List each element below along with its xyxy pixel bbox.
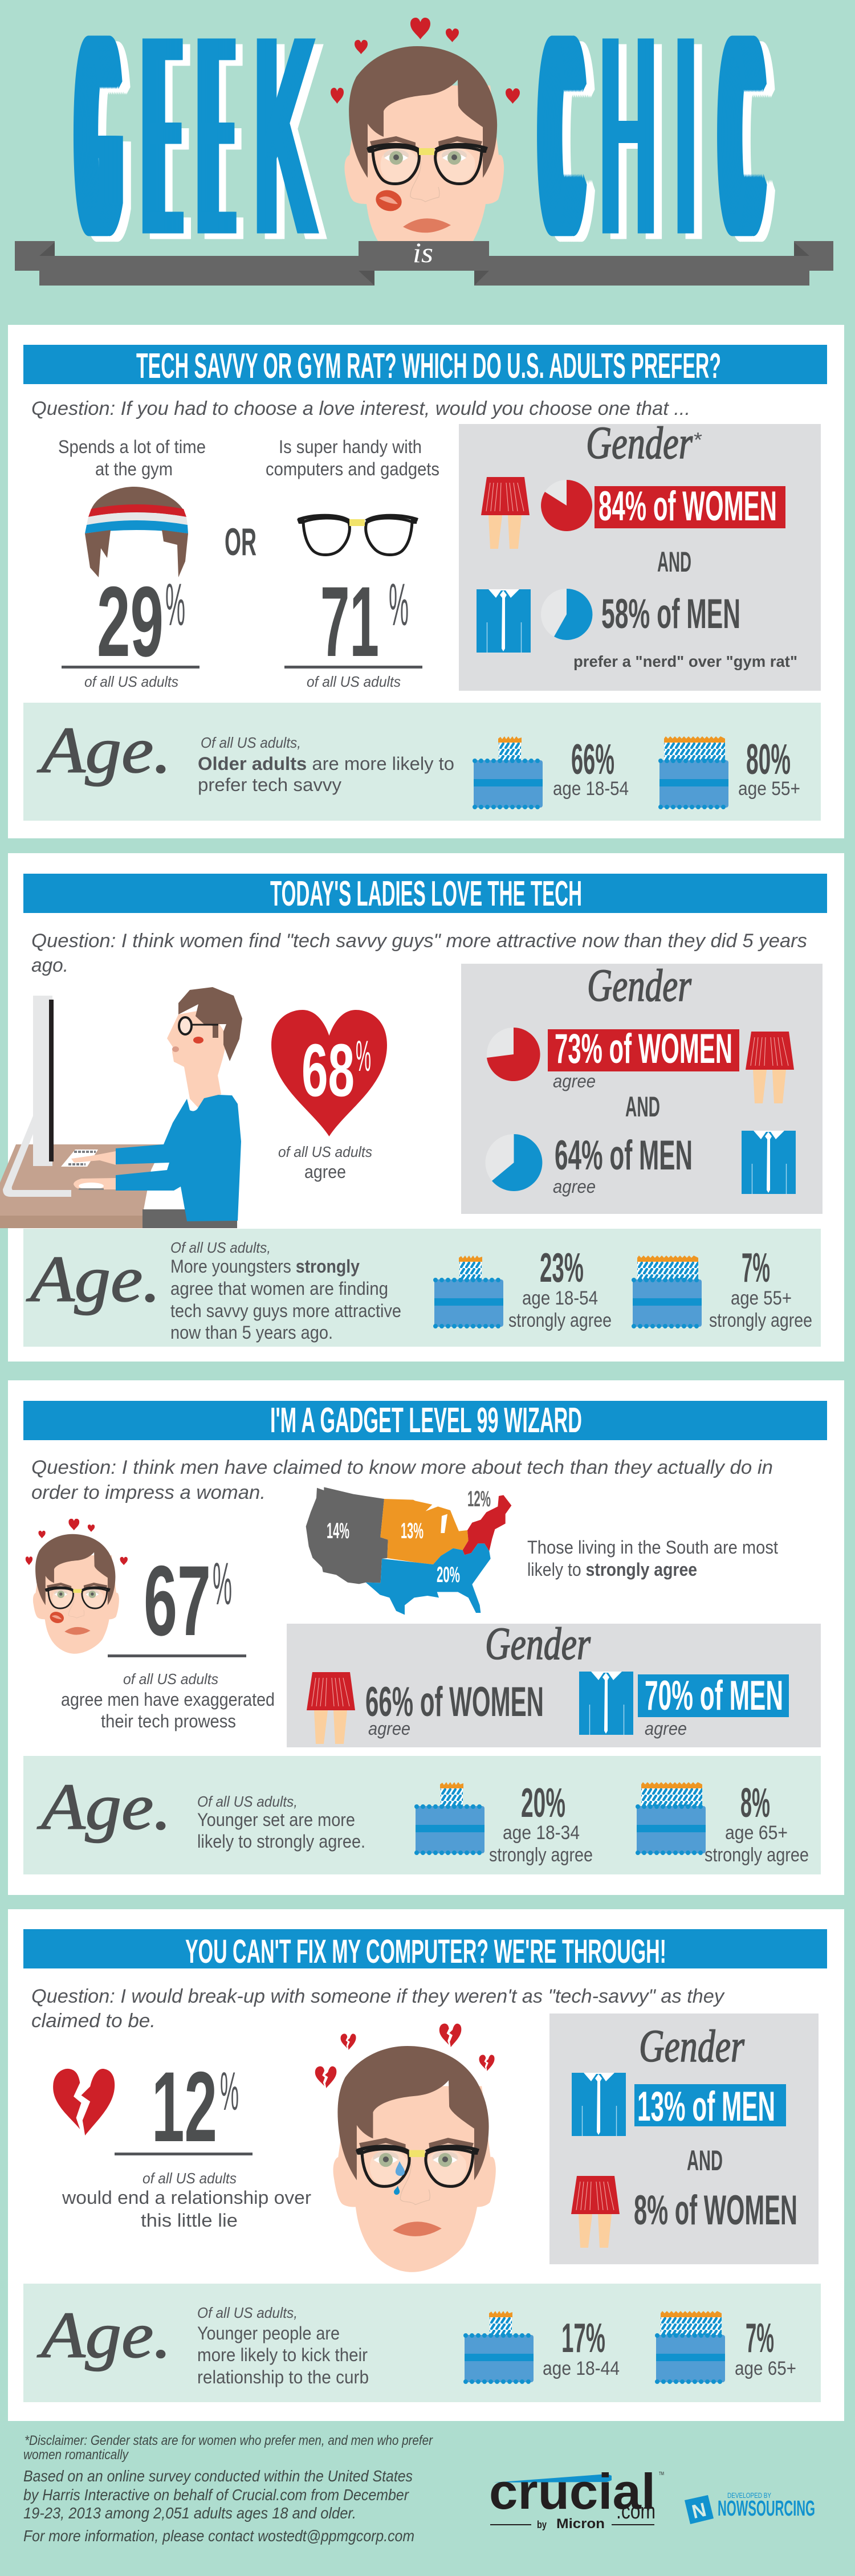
age description <box>198 734 454 795</box>
option: gym: at the gym <box>95 459 173 479</box>
stat: 29% <box>62 566 199 690</box>
stat: 68% heart <box>271 1010 387 1136</box>
age description: relationship to the curb <box>197 2367 369 2387</box>
icon: cake large <box>637 1782 706 1853</box>
icon: glasses <box>297 516 418 555</box>
caption: 68%: agree <box>304 1161 346 1182</box>
logo: crucial.com: TM <box>659 2471 664 2476</box>
age description: Of all US adults, <box>197 2304 298 2321</box>
age description <box>197 1793 365 1852</box>
icon: cake small <box>465 2311 534 2382</box>
age description: likely to strongly agree. <box>197 1831 365 1852</box>
stat: 12%: 12 <box>152 2052 217 2163</box>
icon: broken heart <box>53 2069 115 2135</box>
age description: Of all US adults, <box>170 1239 271 1256</box>
age description: now than 5 years ago. <box>170 1322 333 1343</box>
icon: cake small <box>474 736 543 808</box>
footer: disclaimer and sources: by Harris Interactive on behalf of Crucial.com from December <box>23 2486 409 2504</box>
stat: 7% <box>735 2316 796 2379</box>
stat: 8% <box>705 1780 809 1866</box>
stat: 7% <box>709 1245 812 1331</box>
icon: shirt <box>579 1672 633 1735</box>
logo: crucial.com: .com <box>616 2500 656 2524</box>
title word: GEEK <box>71 0 327 296</box>
stat: 64% of men: 64% of MEN <box>555 1132 693 1179</box>
caption: prefer a "nerd" over "gym rat" <box>573 653 797 670</box>
header illustration: geek head <box>344 46 504 268</box>
heading: Age: Age. <box>36 1771 172 1843</box>
icon: lipstick kiss <box>373 188 404 214</box>
stat: 29%: of all US adults <box>84 673 178 690</box>
stat: 66% of women: 66% of WOMEN <box>365 1679 544 1725</box>
question <box>31 930 807 976</box>
stat: 67%: of all US adults <box>123 1670 218 1688</box>
text: is: is <box>413 237 433 268</box>
panel: gadget level 99 wizard <box>8 1380 844 1895</box>
stat: 66% <box>553 735 629 800</box>
age description: more likely to kick their <box>197 2345 368 2365</box>
question: Question: I would break-up with someone if they weren't as "tech-savvy" as they <box>31 1986 725 2007</box>
heading: Gender: Gender <box>485 1619 591 1669</box>
panel: gender <box>549 2013 819 2264</box>
question <box>31 1457 773 1503</box>
stat: 71%: % <box>389 572 409 638</box>
option: tech: computers and gadgets <box>266 459 439 479</box>
stat: 80%: age 55+ <box>738 778 800 800</box>
heading: Age: Age. <box>36 714 172 786</box>
icon: hair with sweatband <box>85 487 188 577</box>
logo: nowsourcing <box>685 2491 815 2524</box>
heading <box>23 1401 827 1440</box>
question: Question: I think women find "tech savvy guys" more attractive now than they did 5 years <box>31 930 807 952</box>
panel: age <box>23 1229 821 1347</box>
stat: 66%: 66% <box>571 735 614 783</box>
ribbon banner <box>15 237 833 286</box>
stat: 12%: this little lie <box>141 2210 238 2231</box>
logo: nowsourcing: N <box>690 2499 709 2523</box>
stat: 73% of women <box>548 1026 739 1091</box>
age description: Of all US adults, <box>197 1793 298 1810</box>
panel: you can't fix my computer <box>8 1909 844 2421</box>
map caption: Those living in the South are most <box>527 1537 778 1558</box>
footer: disclaimer and sources: Based on an online survey conducted within the United States <box>23 2467 413 2485</box>
map: US regions <box>306 1487 511 1615</box>
question <box>31 1986 725 2032</box>
footer: disclaimer and sources <box>23 2433 433 2545</box>
panel: age <box>23 1756 821 1874</box>
icon: skirt <box>746 1032 794 1103</box>
age description: Younger people are <box>197 2323 340 2343</box>
stat: 17%: age 18-44 <box>543 2358 620 2379</box>
stat: 20% <box>489 1780 593 1866</box>
pie: 58% <box>541 589 592 640</box>
illustration: crying geek head <box>333 2046 496 2272</box>
stat: 20%: age 18-34 <box>503 1822 580 1844</box>
icon: cake large <box>656 2311 725 2382</box>
icon: floating hearts <box>331 18 520 104</box>
illustration: small geek head with hearts <box>26 1519 128 1654</box>
stat: 70% of men: agree <box>645 1718 687 1739</box>
stat: 67%: 67 <box>144 1546 211 1657</box>
icon: shirt <box>572 2073 626 2136</box>
stat: 12% <box>62 2052 311 2231</box>
age description <box>170 1239 401 1343</box>
title word: CHIC <box>535 0 775 296</box>
text: AND: AND <box>687 2145 723 2176</box>
map caption: likely to strongly agree <box>527 1559 697 1580</box>
panel: today's ladies love the tech <box>0 853 844 2545</box>
stat: 66% of women: agree <box>368 1718 410 1739</box>
option: tech: Is super handy with <box>279 437 422 457</box>
icon: shirt <box>742 1131 796 1194</box>
stat: 8%: age 65+ <box>725 1822 788 1844</box>
heading: TODAY'S LADIES LOVE THE TECH <box>270 874 582 914</box>
icon: cake small <box>416 1782 484 1853</box>
stat: 80% <box>738 735 800 800</box>
age description: Of all US adults, <box>201 734 301 751</box>
stat: 68% heart: % <box>356 1032 371 1081</box>
map: US regions: 20% <box>437 1563 460 1587</box>
age description <box>197 2304 369 2387</box>
heading: Gender: Gender <box>587 961 692 1011</box>
icon: skirt <box>307 1672 355 1744</box>
stat: 80%: 80% <box>746 735 791 783</box>
icon: shirt <box>477 589 531 653</box>
stat: 73% of women: agree <box>553 1071 596 1091</box>
text: AND: AND <box>625 1091 660 1123</box>
stat: 70% of men <box>638 1673 789 1739</box>
stat: 12%: of all US adults <box>142 2170 237 2187</box>
logo: crucial.com: crucial <box>489 2463 656 2520</box>
stat: 20%: 20% <box>521 1780 565 1826</box>
stat: 64% of men: agree <box>553 1176 596 1197</box>
stat: 29%: 29 <box>97 566 164 678</box>
panel: age <box>23 2284 821 2402</box>
illustration: person at computer <box>0 987 242 1228</box>
stat: 71%: of all US adults <box>307 673 401 690</box>
map: US regions: 14% <box>327 1519 349 1543</box>
stat: 7%: strongly agree <box>709 1310 812 1331</box>
panel: tech savvy or gym rat <box>8 325 844 838</box>
stat: 12%: % <box>220 2061 239 2122</box>
stat: 67%: their tech prowess <box>101 1711 236 1731</box>
stat: 7%: 7% <box>746 2316 774 2361</box>
heading <box>23 1929 827 1970</box>
stat: 67%: agree men have exaggerated <box>61 1689 275 1710</box>
age description: More youngsters strongly <box>170 1256 360 1277</box>
map: US regions: 12% <box>467 1487 491 1511</box>
logo: crucial.com: by <box>537 2519 547 2530</box>
stat: 71% <box>284 566 422 690</box>
icon: tears <box>394 2161 405 2195</box>
option: gym <box>58 437 206 479</box>
map caption <box>527 1537 778 1580</box>
icon: cake small <box>434 1256 503 1327</box>
pie: 64% <box>486 1134 543 1191</box>
asterisk: * <box>694 428 702 451</box>
logo: nowsourcing: DEVELOPED BY <box>727 2491 771 2500</box>
question: ago. <box>31 955 68 976</box>
stat: 8%: 8% <box>740 1780 770 1826</box>
stat: 8%: strongly agree <box>705 1844 809 1866</box>
question: Question: If you had to choose a love interest, would you choose one that ... <box>31 398 690 419</box>
question: claimed to be. <box>31 2010 156 2032</box>
stat: 13% of men <box>634 2084 786 2130</box>
text: OR: OR <box>225 520 256 564</box>
question: Question: I think men have claimed to know more about tech than they actually do in <box>31 1457 773 1478</box>
age description: agree that women are finding <box>170 1278 388 1299</box>
caption: 68% <box>278 1143 372 1182</box>
footer: disclaimer and sources: women romantically <box>23 2447 129 2463</box>
stat: 68% heart: 68 <box>302 1028 355 1112</box>
option: gym: Spends a lot of time <box>58 437 206 457</box>
stat: 17%: 17% <box>561 2316 605 2361</box>
stat: 71%: 71 <box>320 566 379 678</box>
age description: tech savvy guys more attractive <box>170 1301 401 1321</box>
heading: Age: Age. <box>36 2299 172 2371</box>
panel: gender <box>459 418 821 691</box>
stat: 20%: strongly agree <box>489 1844 593 1866</box>
stat: 67%: % <box>213 1551 232 1617</box>
stat: 64% of men <box>553 1132 693 1197</box>
footer: disclaimer and sources: *Disclaimer: Gender stats are for women who prefer men, and men who prefer <box>25 2433 433 2448</box>
heading: I'M A GADGET LEVEL 99 WIZARD <box>270 1401 582 1440</box>
pie: 73% <box>487 1028 540 1081</box>
footer: disclaimer and sources: 19-23, 2013 among 2,051 adults ages 18 and older. <box>23 2504 356 2522</box>
caption: 68%: of all US adults <box>278 1143 372 1160</box>
footer: disclaimer and sources: For more information, please contact wostedt@ppmgcorp.com <box>23 2527 414 2545</box>
heading <box>23 874 827 914</box>
stat: 23%: age 18-54 <box>522 1287 598 1309</box>
panel: gender <box>287 1619 821 1747</box>
stat: 29%: % <box>165 572 185 638</box>
stat: 58% of men: 58% of MEN <box>601 591 740 637</box>
heading: Gender: Gender <box>639 2021 745 2072</box>
stat: 66%: age 18-54 <box>553 778 629 800</box>
stat: 7%: 7% <box>742 1245 770 1291</box>
stat: 17% <box>543 2316 620 2379</box>
icon: cake large <box>659 736 728 808</box>
stat: 67% <box>61 1546 275 1731</box>
stat: 7%: age 55+ <box>731 1287 792 1309</box>
age description: Older adults are more likely to <box>198 753 454 774</box>
age description: prefer tech savvy <box>198 775 341 795</box>
pie: 84% <box>541 480 592 531</box>
question: order to impress a woman. <box>31 1482 266 1503</box>
stat: 23% <box>508 1245 612 1331</box>
panel: gender <box>461 961 823 1214</box>
stat: 12%: would end a relationship over <box>62 2187 311 2208</box>
option: tech <box>266 437 439 479</box>
icon: skirt <box>481 477 530 549</box>
panel: age <box>23 703 821 821</box>
stat: 23%: strongly agree <box>508 1310 612 1331</box>
icon: broken hearts <box>315 2024 495 2088</box>
stat: 7%: age 65+ <box>735 2358 796 2379</box>
stat: 23%: 23% <box>540 1245 584 1291</box>
stat: 66% of women <box>365 1679 544 1739</box>
icon: cake large <box>633 1256 702 1327</box>
age description: Younger set are more <box>197 1809 355 1830</box>
map: US regions: 13% <box>401 1519 424 1543</box>
heading: Gender: Gender <box>586 418 693 468</box>
icon: skirt <box>571 2176 620 2248</box>
text: AND: AND <box>657 546 691 578</box>
logo: crucial.com: Micron <box>556 2516 605 2532</box>
heading: Age: Age. <box>26 1243 161 1315</box>
